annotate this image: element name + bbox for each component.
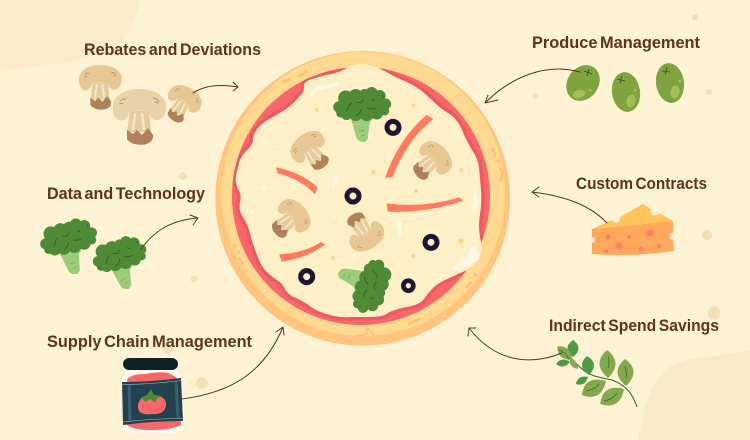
panel: Supply Chain Management: [47, 327, 284, 433]
icon: broccoli: [37, 215, 154, 295]
icon: cheese: [592, 204, 674, 255]
pizza: [215, 51, 510, 346]
pepper strips: [276, 115, 463, 262]
background blob: top left: [0, 0, 140, 72]
icon: mushrooms: [79, 65, 206, 145]
pizza mushrooms: [262, 125, 458, 257]
arrow: [532, 187, 607, 223]
arrow: [182, 327, 284, 399]
heading: Rebates and Deviations: [84, 40, 261, 59]
pizza broccoli: [327, 87, 399, 319]
pizza crust: [215, 51, 510, 346]
cheese highlights: [250, 82, 479, 270]
panel: Data and Technology: [37, 184, 206, 295]
arrow: [141, 215, 198, 249]
arrow: [485, 69, 580, 103]
panel: Produce Management: [485, 33, 700, 114]
panel: Custom Contracts: [532, 174, 707, 255]
heading: Supply Chain Management: [47, 332, 252, 351]
icon: herb sprig: [554, 340, 637, 411]
pizza olive rings: [301, 121, 437, 291]
icon: olives: [559, 59, 687, 114]
background dots: [163, 14, 720, 389]
cheese seasoning dots: [273, 104, 464, 260]
heading: Custom Contracts: [576, 174, 707, 193]
arrow: [468, 328, 562, 360]
panel: Rebates and Deviations: [79, 40, 261, 145]
arrow: [193, 82, 238, 93]
heading: Produce Management: [532, 33, 700, 52]
icon: tomato sauce jar: [122, 358, 184, 433]
panel: Indirect Spend Savings: [468, 316, 719, 411]
heading: Data and Technology: [47, 184, 206, 203]
heading: Indirect Spend Savings: [549, 316, 719, 335]
tomato sauce: [232, 64, 490, 325]
melted cheese: [236, 64, 481, 317]
background blob: bottom right: [638, 350, 750, 440]
